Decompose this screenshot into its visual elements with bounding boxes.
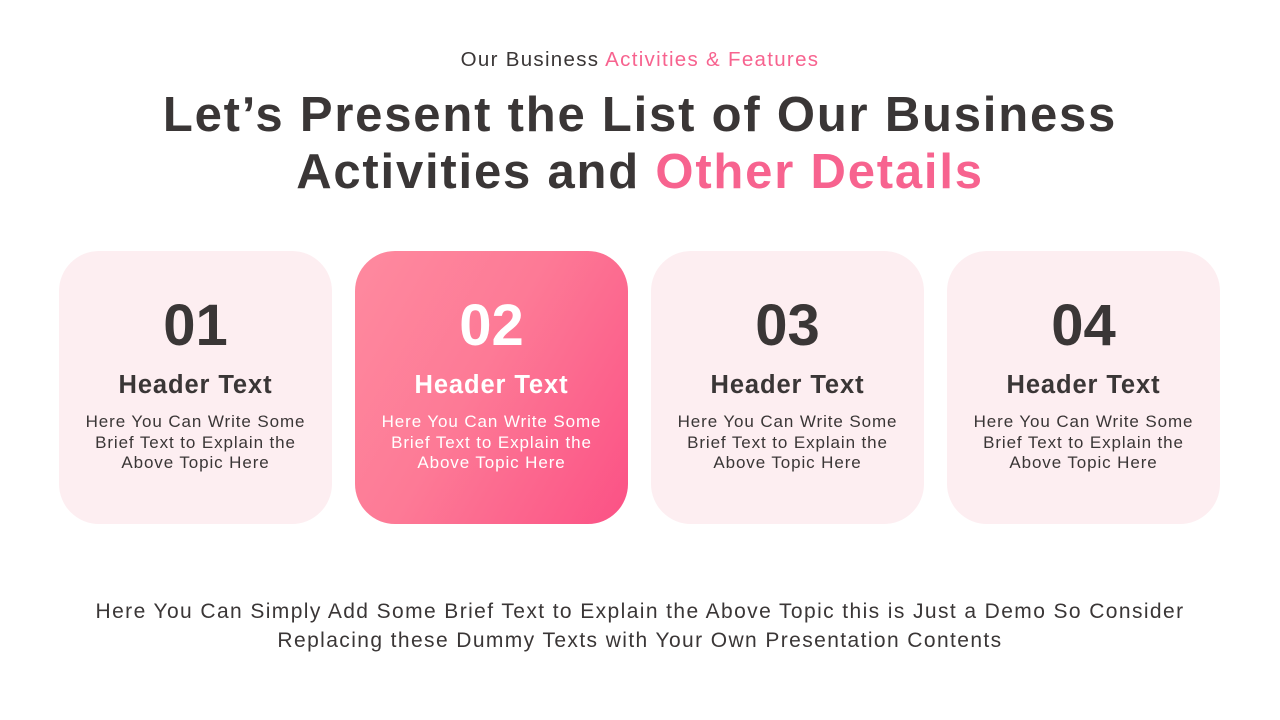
header 02: Header Text: [414, 371, 568, 399]
card 03: [651, 251, 924, 524]
text 03: [678, 412, 897, 472]
header 01: Header Text: [118, 371, 272, 399]
text 04: Here You Can Write Some: [974, 412, 1193, 431]
number 04: 04: [1051, 293, 1116, 358]
text 02: Here You Can Write Some: [382, 412, 601, 431]
subtitle: Our Business Activities & Features: [461, 48, 819, 71]
bottom text: Replacing these Dummy Texts with Your Own Presentation Contents: [277, 629, 1003, 652]
card 01: [59, 251, 332, 524]
text 04: Brief Text to Explain the: [983, 432, 1184, 452]
text 01: Here You Can Write Some: [86, 412, 305, 431]
text 02: Above Topic Here: [417, 453, 566, 472]
text 02: Brief Text to Explain the: [391, 432, 592, 452]
header 03: Header Text: [710, 371, 864, 399]
number 01: 01: [163, 293, 228, 358]
text 03: Above Topic Here: [713, 453, 862, 472]
title: Activities and Other Details: [296, 145, 984, 199]
title: Let’s Present the List of Our Business: [163, 88, 1117, 142]
title: [163, 88, 1117, 199]
bottom text: [96, 600, 1184, 652]
text 04: [974, 412, 1193, 472]
header 04: Header Text: [1006, 371, 1160, 399]
text 02: [382, 412, 601, 472]
text 04: Above Topic Here: [1009, 453, 1158, 472]
text 03: Here You Can Write Some: [678, 412, 897, 431]
card 02 highlighted: [355, 251, 628, 524]
card 04: [947, 251, 1220, 524]
text 01: [86, 412, 305, 472]
number 02: 02: [459, 293, 524, 358]
text 01: Above Topic Here: [121, 453, 270, 472]
text 03: Brief Text to Explain the: [687, 432, 888, 452]
bottom text: Here You Can Simply Add Some Brief Text to Explain the Above Topic this is Just a Demo So Consider: [96, 600, 1184, 623]
text 01: Brief Text to Explain the: [95, 432, 296, 452]
number 03: 03: [755, 293, 820, 358]
